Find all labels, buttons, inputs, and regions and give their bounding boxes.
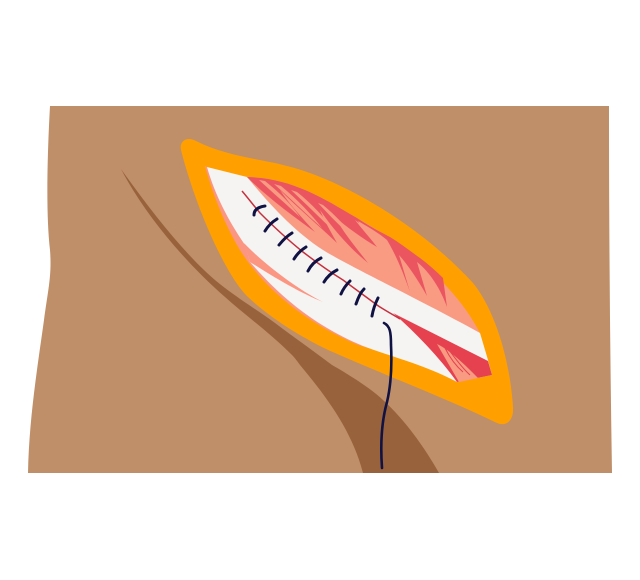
suture thread (381, 323, 391, 468)
muscle red fibres (247, 177, 447, 307)
skin panel (28, 106, 612, 473)
stitches (254, 206, 378, 316)
white tissue (207, 167, 492, 382)
salmon streak (244, 243, 323, 302)
orange wound border (181, 139, 513, 424)
upper muscle salmon (247, 177, 480, 333)
red lower triangle (393, 313, 492, 382)
lower salmon tissue (205, 166, 375, 350)
salmon fibres in triangle (437, 344, 478, 382)
skin fold shadow (121, 169, 439, 473)
wound interior (205, 166, 492, 382)
red incision line (242, 191, 400, 319)
